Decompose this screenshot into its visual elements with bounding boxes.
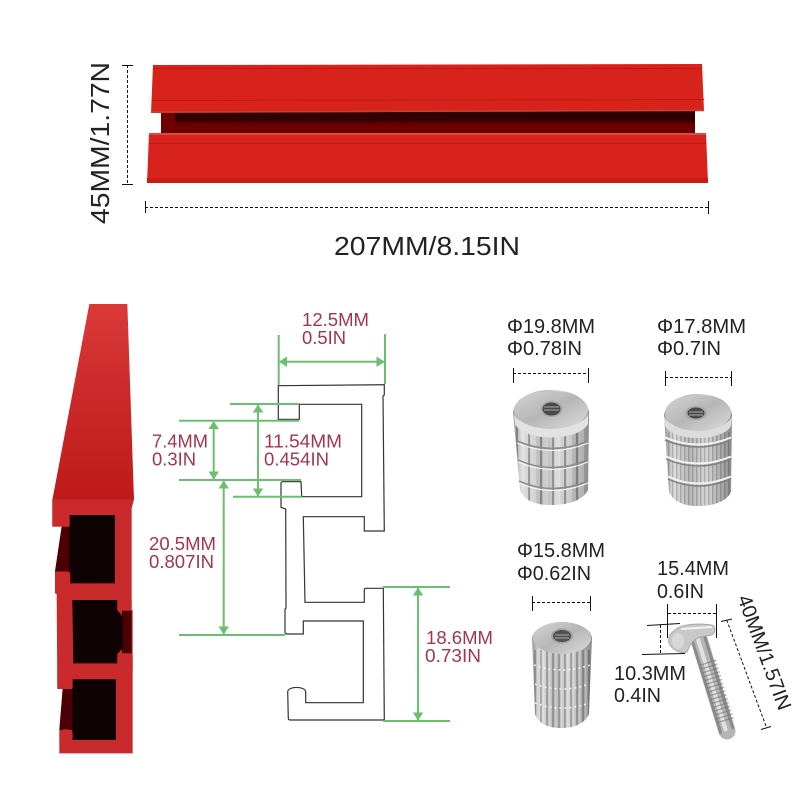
bolt head width dimension: 0.6IN — [657, 581, 704, 603]
top rail product photo — [147, 64, 708, 183]
nut label 17.8 — [657, 316, 746, 386]
icon: knurled nut large — [513, 390, 589, 505]
nut label 15.8 — [517, 540, 605, 611]
profile dimension labels: 18.6MM — [426, 627, 493, 648]
profile dimension labels — [149, 309, 493, 666]
profile dimension labels: 0.3IN — [152, 449, 196, 470]
icon: knurled nut medium — [664, 394, 732, 506]
profile dimension labels: 11.54MM — [264, 431, 342, 452]
bolt head height dimension: 0.4IN — [614, 685, 661, 707]
icon: knurled nut small — [532, 622, 592, 728]
nut label 19.8 — [507, 316, 595, 383]
bolt head height dimension: 10.3MM — [614, 663, 686, 685]
profile dimension labels: 20.5MM — [149, 533, 216, 554]
profile cross-section drawing — [278, 385, 384, 720]
nut label 15.8: Φ15.8MM — [517, 540, 605, 562]
rail cross-section — [52, 499, 134, 753]
profile dimension labels: 0.807IN — [149, 551, 214, 572]
icon: T-bolt — [669, 624, 733, 734]
nut label 17.8: Φ17.8MM — [657, 316, 746, 338]
profile dimension labels: 0.454IN — [264, 449, 329, 470]
profile dimension labels: 0.5IN — [302, 327, 346, 348]
dimension: rail length: 207MM/8.15IN — [334, 231, 520, 261]
profile dimension labels: 7.4MM — [152, 431, 208, 452]
nut label 19.8: Φ19.8MM — [507, 316, 595, 338]
bolt head width dimension: 15.4MM — [657, 558, 729, 580]
end view of red rail — [52, 304, 134, 753]
bolt head width dimension — [657, 558, 729, 638]
green dimension lines and arrows — [179, 334, 450, 721]
bolt length dimension: 40MM/1.57IN — [733, 592, 795, 713]
dimension: rail height: 45MM/1.77N — [85, 62, 115, 224]
nut label 19.8: Φ0.78IN — [507, 338, 582, 360]
profile dimension labels: 0.73IN — [425, 645, 481, 666]
nut label 15.8: Φ0.62IN — [517, 563, 591, 585]
profile dimension labels: 12.5MM — [302, 309, 369, 330]
bolt head height dimension — [614, 624, 686, 707]
nut label 17.8: Φ0.7IN — [657, 338, 721, 360]
